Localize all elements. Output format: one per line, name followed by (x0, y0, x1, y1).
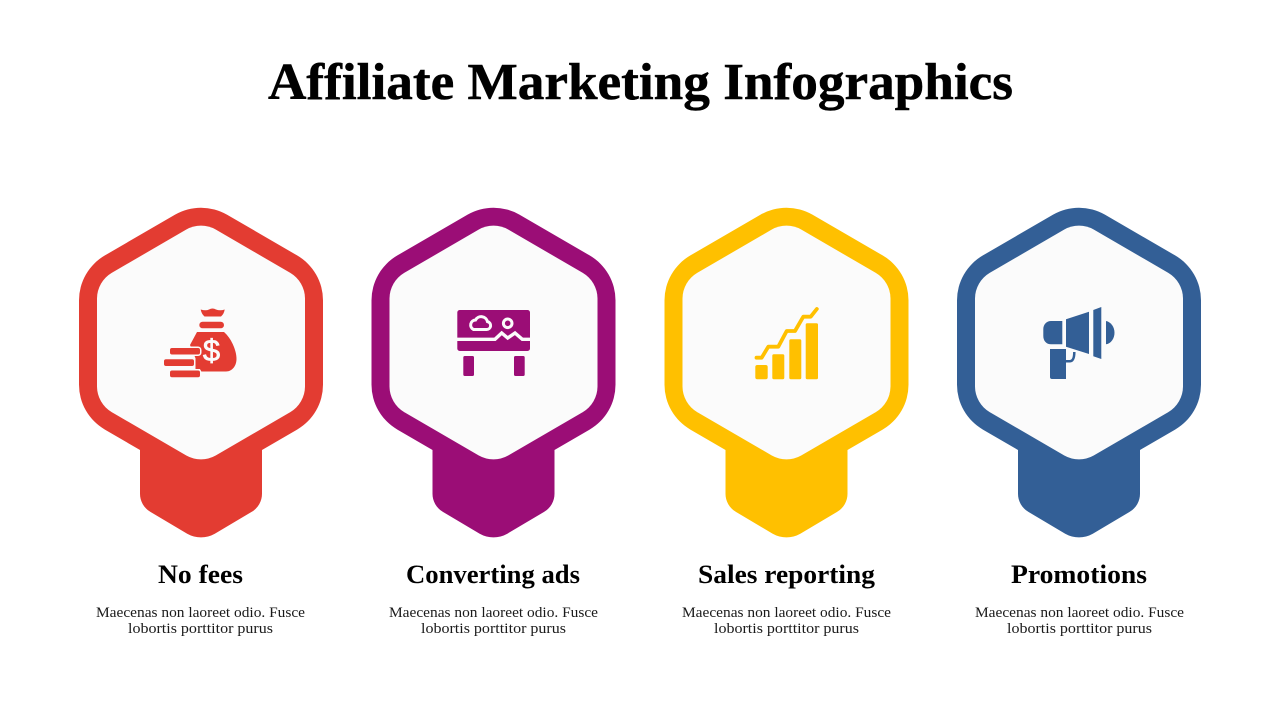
panel: no fees (79, 208, 323, 637)
hexagon badge: purple (371, 208, 616, 537)
icon: money bag and coins (164, 308, 236, 377)
hexagon badge: blue (957, 208, 1201, 537)
heading: converting ads: Converting ads (406, 559, 580, 589)
text block: no fees description: Maecenas non laoreet odio. Fusce (96, 605, 305, 621)
text block: no fees description (96, 605, 305, 637)
icon: money bag and coins: $ (203, 333, 220, 368)
title: Affiliate Marketing Infographics (268, 54, 1013, 111)
icon: billboard (456, 310, 531, 376)
heading: promotions: Promotions (1011, 559, 1147, 589)
panel: sales reporting (664, 208, 909, 637)
panel: promotions (957, 208, 1201, 637)
text block: promotions description: lobortis porttitor purus (1007, 621, 1152, 637)
hexagon badge: red (79, 208, 323, 537)
text block: converting ads description (389, 605, 598, 637)
icon: rising bar chart (755, 309, 818, 379)
heading: sales reporting: Sales reporting (698, 559, 875, 589)
text block: sales reporting description: Maecenas non laoreet odio. Fusce (682, 605, 891, 621)
hexagon badge: yellow (664, 208, 909, 537)
text block: converting ads description: lobortis porttitor purus (421, 621, 566, 637)
icon: megaphone (1043, 307, 1114, 379)
text block: sales reporting description: lobortis porttitor purus (714, 621, 859, 637)
panel: converting ads (371, 208, 616, 637)
text block: promotions description: Maecenas non laoreet odio. Fusce (975, 605, 1184, 621)
text block: sales reporting description (682, 605, 891, 637)
text block: promotions description (975, 605, 1184, 637)
text block: converting ads description: Maecenas non laoreet odio. Fusce (389, 605, 598, 621)
text block: no fees description: lobortis porttitor purus (128, 621, 273, 637)
heading: no fees: No fees (158, 559, 243, 589)
